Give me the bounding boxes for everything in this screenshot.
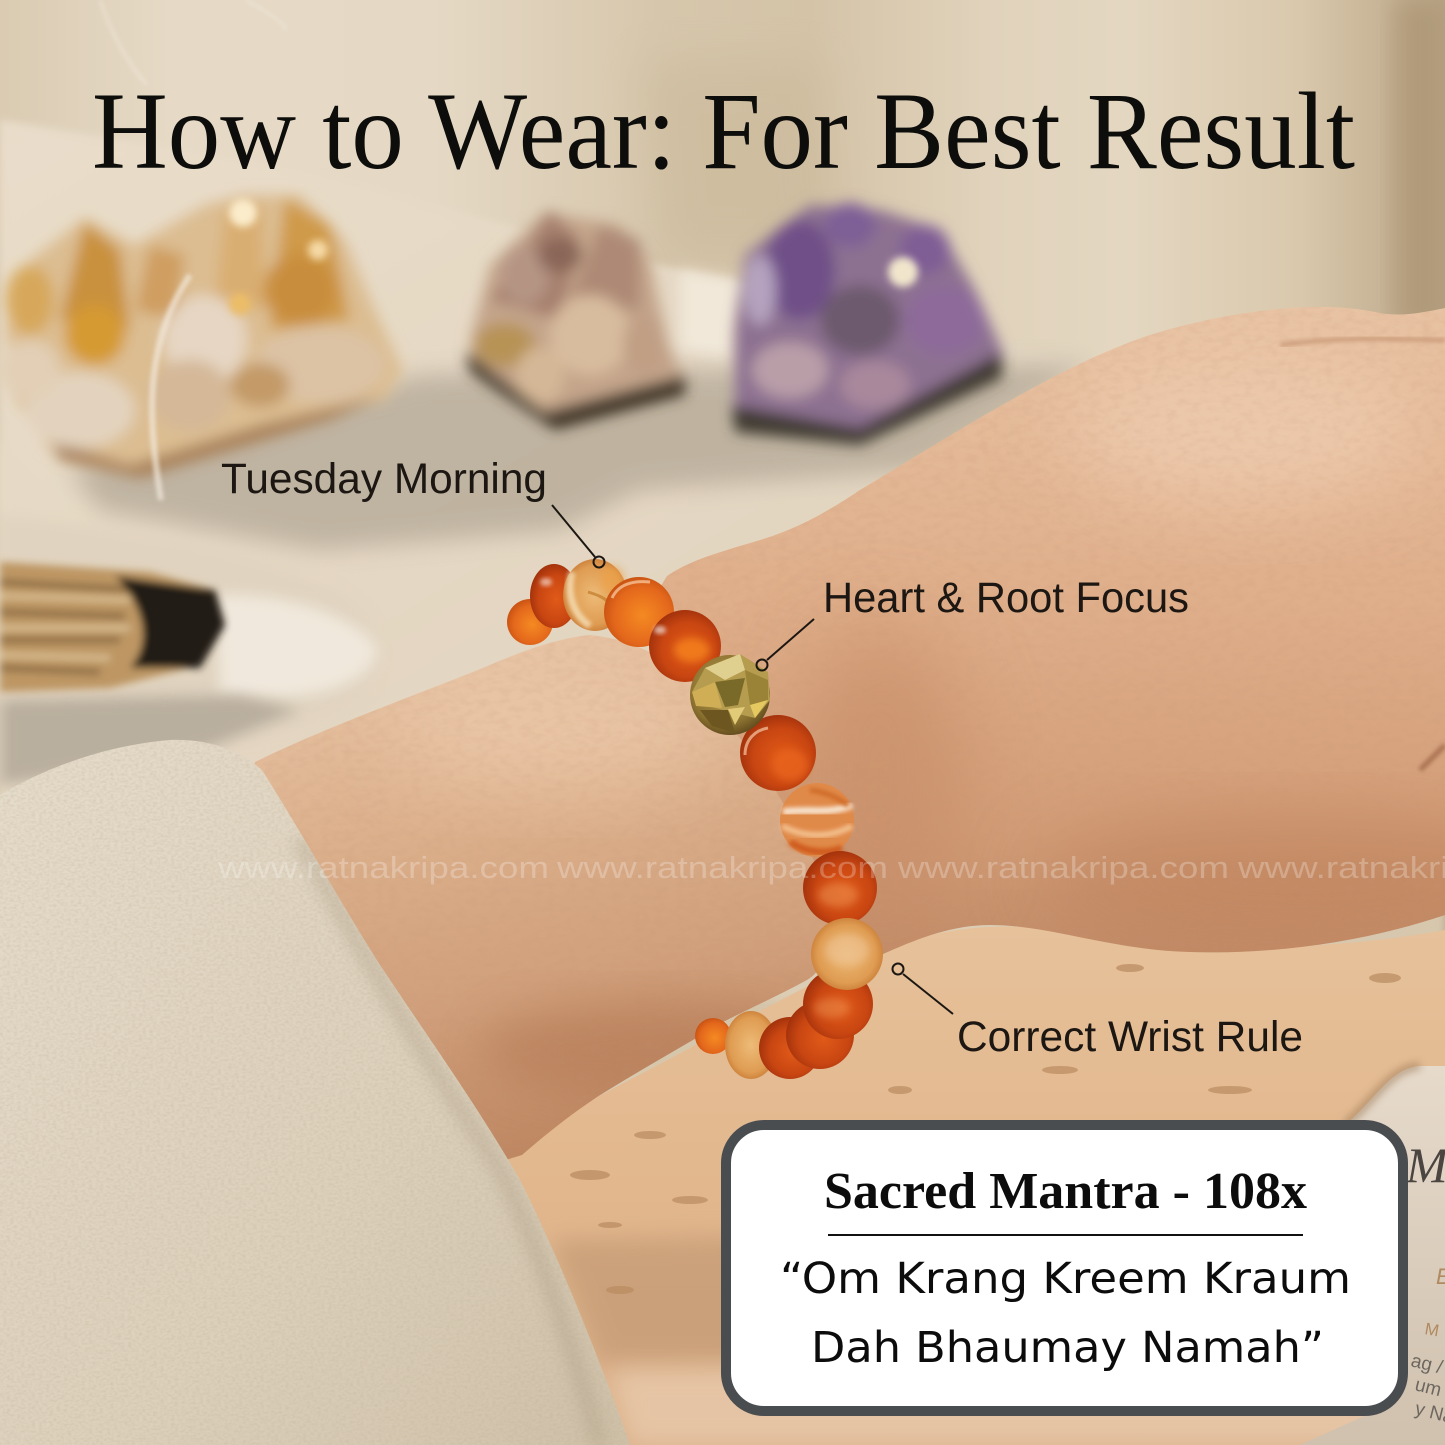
callout: Heart and Root Focus — [756, 574, 1189, 670]
mantra text: Dah Bhaumay Namah” — [811, 1323, 1324, 1373]
watermark: www.ratnakripa.com — [556, 850, 888, 885]
mantra heading: Sacred Mantra - 108x — [824, 1163, 1307, 1220]
crystal: citrine cluster — [0, 195, 403, 478]
bead: red carnelian — [649, 610, 721, 682]
printed card behind mantra box: ag / — [1409, 1350, 1445, 1379]
callout: Heart and Root Focus: Heart & Root Focus — [823, 574, 1189, 622]
crystal: amethyst cluster — [732, 203, 1002, 445]
bead: marbled red — [803, 851, 877, 925]
incense smoke — [100, 0, 287, 500]
printed card behind mantra box: um — [1413, 1374, 1443, 1401]
watermark: www.ratnakripa.com — [897, 850, 1229, 885]
crystal: smoky pink cluster — [465, 210, 685, 430]
bead: banded top agate — [563, 559, 627, 631]
travertine stone surface — [440, 927, 1445, 1445]
watermark — [217, 850, 1445, 885]
bracelet back beads — [507, 564, 578, 645]
bead: deep red carnelian — [740, 715, 816, 791]
carnelian bracelet — [563, 559, 883, 1079]
shell dish and palo santo stick — [0, 515, 379, 785]
printed card behind mantra box — [1300, 1066, 1445, 1445]
forearm — [240, 630, 840, 1180]
bead: orange carnelian — [604, 577, 674, 647]
sleeve — [0, 730, 640, 1445]
callout: Tuesday Morning — [221, 455, 604, 568]
callout: Correct Wrist Rule: Correct Wrist Rule — [957, 1013, 1303, 1061]
bead: faceted gold spacer — [690, 654, 770, 735]
callout: Tuesday Morning: Tuesday Morning — [221, 455, 547, 503]
watermark: www.ratnakripa.com — [217, 850, 549, 885]
callout: Correct Wrist Rule — [892, 964, 1303, 1061]
printed card behind mantra box: M — [1423, 1319, 1441, 1340]
background table surface — [0, 120, 1445, 1000]
hand — [640, 300, 1445, 960]
title: How to Wear: For Best Result — [92, 70, 1355, 192]
lower beads — [695, 918, 883, 1079]
mantra text — [780, 1254, 1351, 1373]
bead: banded agate — [780, 783, 854, 857]
mantra card — [726, 1125, 1403, 1411]
mantra text: “Om Krang Kreem Kraum — [780, 1254, 1351, 1304]
